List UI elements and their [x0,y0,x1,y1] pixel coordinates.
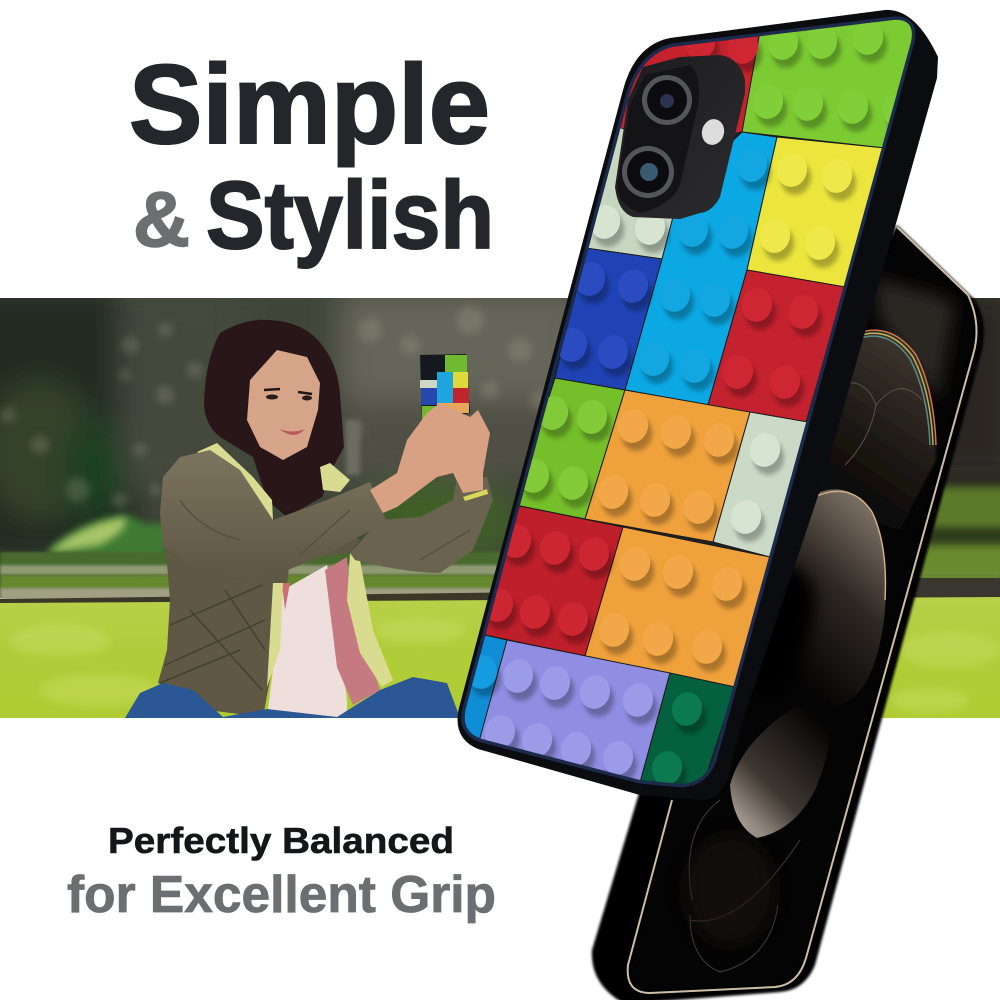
mouth [279,429,305,435]
case body [458,10,938,800]
bush [45,515,170,560]
quilting [160,585,265,690]
lawn [0,470,1000,718]
back phone screen with wallpaper [680,271,964,972]
far arm sleeve [350,477,493,573]
tagline: Perfectly Balanced for Excellent Grip: for Excellent Grip [67,866,496,924]
lens capsule [617,65,699,213]
studs [754,22,897,134]
back phone body [592,225,984,1000]
heading: Simple & Stylish: Stylish [206,162,494,269]
top lens [642,75,692,125]
wallpaper big shape [793,489,886,700]
hands [370,403,490,513]
tagline: Perfectly Balanced for Excellent Grip: Perfectly Balanced [108,820,454,861]
rainbow arc [858,330,936,445]
lower outlines [689,800,800,972]
right forest edge [920,472,1000,578]
forest backdrop [0,290,1000,598]
wrist band [463,489,488,501]
wallpaper dome [820,331,936,530]
heading: Simple & Stylish [129,42,494,269]
inner dark blob [768,561,821,660]
yellow lining [197,443,393,687]
tagline: Perfectly Balanced for Excellent Grip [67,820,496,924]
camera module [615,55,745,219]
shirt [267,565,347,717]
back phone [592,225,985,1000]
sleeve shading [180,500,470,560]
jeans [125,677,460,718]
bricks [455,10,925,795]
lego back [450,10,930,800]
wallpaper lower bright shape [730,710,828,838]
flash [699,117,727,147]
photo band: woman taking a selfie in a park [0,290,1000,718]
star flare [835,382,922,465]
mini phone [420,354,470,422]
wallpaper top glow [873,278,955,400]
navy rim [465,20,912,784]
phone case [450,10,938,800]
torso jacket [158,538,360,714]
back phone gold rim [628,227,977,993]
bottom lens [622,146,674,198]
person [125,320,493,718]
near arm sleeve [160,450,387,580]
bokeh lights [0,306,550,508]
heading: Simple & Stylish: & [133,175,190,263]
heading: Simple & Stylish: Simple [129,42,490,167]
eyes [264,389,312,394]
plaid shirt [325,557,380,705]
lamp post [346,420,360,475]
face [247,350,320,460]
hair [204,320,344,517]
